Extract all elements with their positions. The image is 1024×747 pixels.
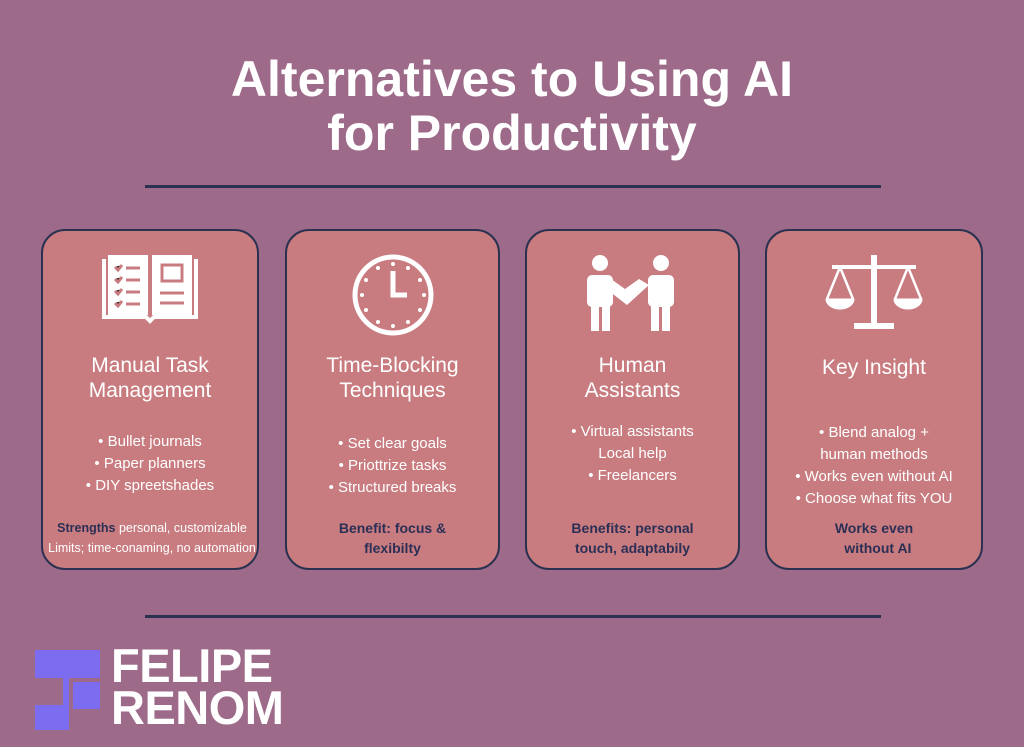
bullets: • Works even without AI — [795, 468, 953, 485]
benefit text: Benefit: focus & — [339, 520, 446, 536]
bullets: • Blend analog + — [819, 424, 929, 441]
logo text: FELIPE — [111, 639, 273, 692]
bullets: • DIY spreetshades — [86, 477, 214, 494]
bullets: human methods — [820, 446, 928, 463]
heading — [326, 354, 459, 402]
title: for Productivity — [327, 105, 697, 161]
bullets: • Bullet journals — [98, 433, 202, 450]
bullets — [571, 423, 694, 484]
logo text: RENOM — [111, 681, 283, 734]
icon: scales — [826, 255, 922, 329]
bullets: • Freelancers — [588, 467, 677, 484]
bullets — [329, 435, 456, 496]
heading: Management — [89, 379, 211, 402]
benefit text: flexibilty — [364, 540, 421, 556]
panel: time-blocking — [285, 229, 500, 570]
logo text — [111, 639, 283, 734]
strengths text — [48, 521, 256, 555]
benefits text — [571, 520, 694, 556]
panel: human assistants — [525, 229, 740, 570]
heading — [89, 354, 212, 402]
bottom text — [834, 520, 913, 556]
icon: book — [102, 255, 198, 324]
heading: Key Insight — [822, 356, 926, 379]
benefits text: Benefits: personal — [571, 520, 694, 536]
heading: Manual Task — [91, 354, 209, 377]
heading: Techniques — [339, 379, 446, 402]
strengths text: Strengths personal, customizable — [57, 521, 247, 535]
heading: Assistants — [585, 379, 680, 402]
bullets: Local help — [598, 445, 667, 462]
panel: key insight — [765, 229, 983, 570]
icon: logo mark — [35, 650, 100, 730]
bullets — [795, 424, 953, 507]
bottom text: Works even — [835, 520, 913, 536]
bullets: • Structured breaks — [329, 479, 456, 496]
heading: Time-Blocking — [326, 354, 459, 377]
bullets: • Virtual assistants — [571, 423, 694, 440]
icon: handshake — [587, 255, 674, 331]
bullets: • Paper planners — [94, 455, 206, 472]
title: Alternatives to Using AI — [231, 51, 793, 107]
heading: Human — [599, 354, 666, 377]
bottom text: without AI — [844, 540, 911, 556]
icon: clock — [352, 254, 434, 336]
benefits text: touch, adaptabily — [575, 540, 690, 556]
logo — [35, 639, 283, 734]
panel: manual task management — [41, 229, 259, 570]
bullets: • Choose what fits YOU — [796, 490, 952, 507]
benefit text — [339, 520, 446, 556]
bullets: • Priottrize tasks — [339, 457, 446, 474]
heading — [584, 354, 680, 402]
strengths text: Limits; time-conaming, no automation — [48, 541, 256, 555]
bullets — [86, 433, 214, 494]
bullets: • Set clear goals — [338, 435, 447, 452]
title — [231, 51, 793, 161]
